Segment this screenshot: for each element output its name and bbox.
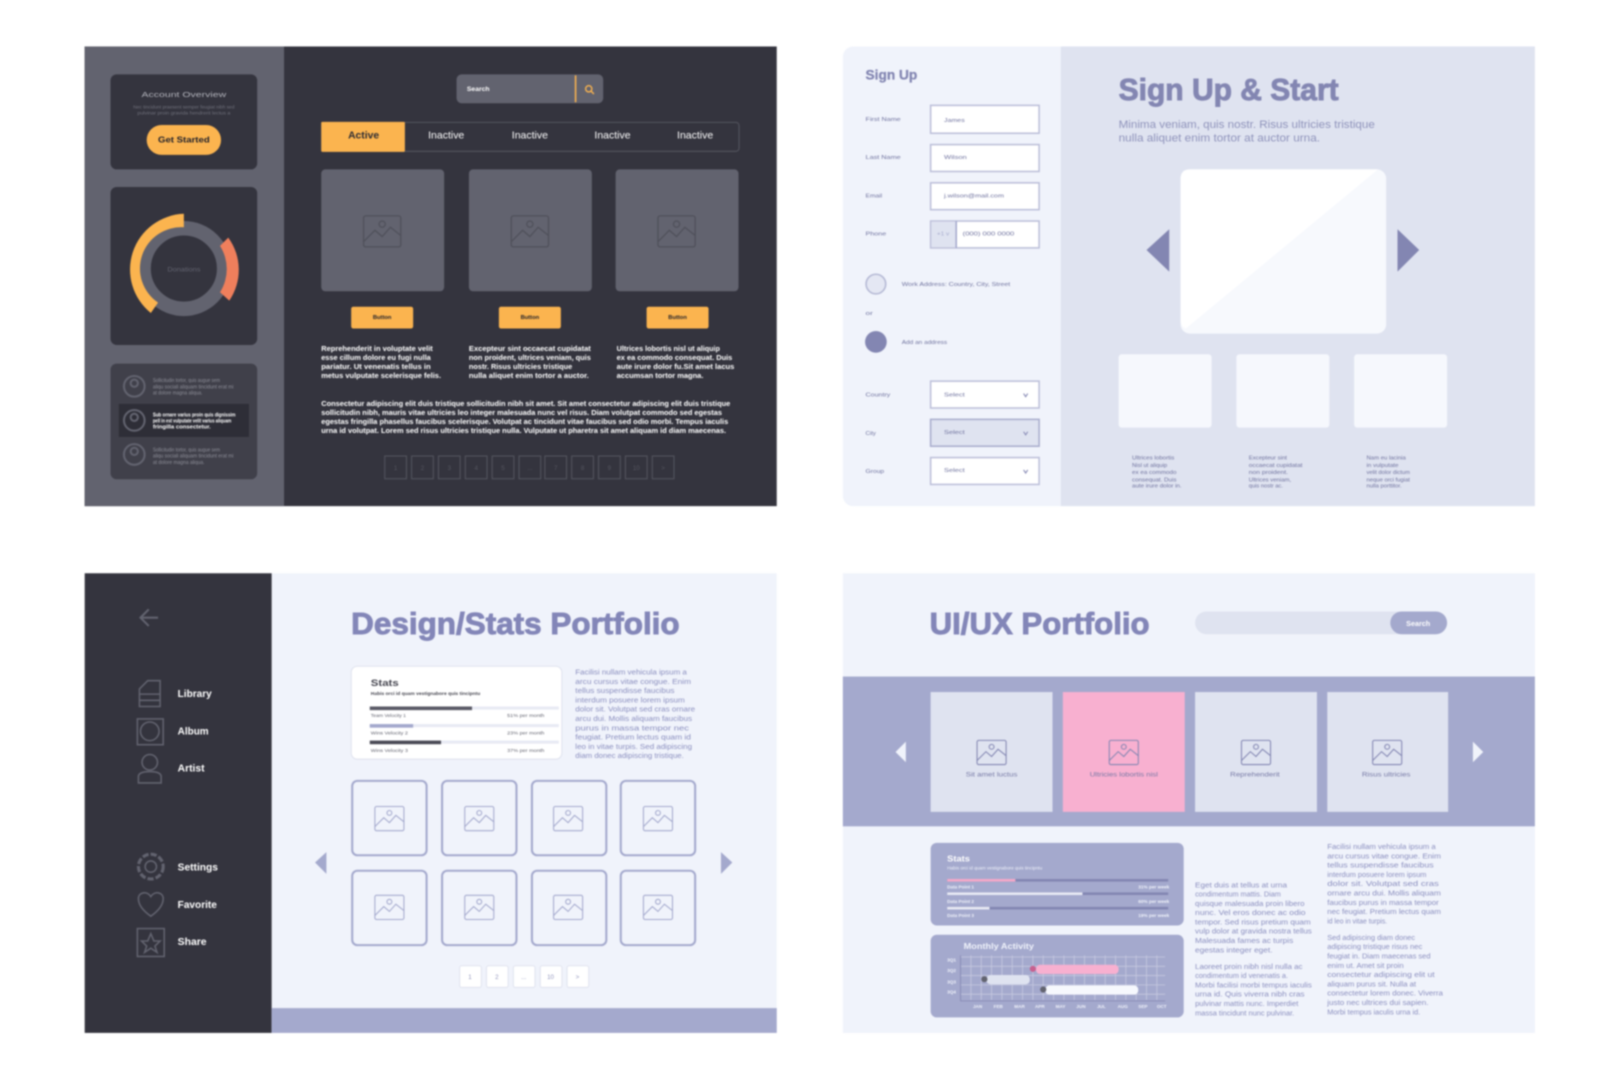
select fields <box>866 381 1039 484</box>
select fields: Select <box>944 430 965 436</box>
text columns: Reprehenderit in voluptate velit <box>321 344 433 353</box>
pagination: 10 <box>633 465 640 472</box>
grid arrows <box>315 852 732 874</box>
text columns: aute irure dolor fu.Sit amet lacus <box>617 362 734 371</box>
image slider <box>1147 169 1419 334</box>
text columns: nulla aliquet enim tortor a auctor. <box>469 371 589 380</box>
stats panel: 19% per week <box>1138 913 1169 919</box>
card: account overview: pulvinar proin gravida hendrerit lectus a <box>137 111 231 117</box>
carousel band: Reprehenderit <box>1230 773 1280 779</box>
card: message list: at dolore magna aliqua. <box>153 460 205 466</box>
tabs <box>321 122 739 152</box>
form fields: Wilson <box>944 155 967 161</box>
thumbnail captions: Ultrices veniam, <box>1249 477 1292 483</box>
card: message list: Sollicitudin tortor, quis augue sem <box>153 447 220 453</box>
activity chart <box>931 935 1184 1017</box>
form fields: Last Name <box>866 155 901 161</box>
pagination: 9 <box>608 465 612 472</box>
text column two: feugiat in. Diam maecenas sed <box>1327 952 1431 961</box>
pagination: 5 <box>501 465 505 472</box>
thumbnail captions: Excepteur sint <box>1249 456 1287 462</box>
form fields: First Name <box>866 117 901 123</box>
stats panel: Data Point 1 <box>947 884 974 890</box>
card: message list: at dolore magna aliqua. <box>153 391 203 397</box>
form fields: Email <box>866 193 882 199</box>
pagination: 4 <box>474 465 478 472</box>
card: account overview: Account Overview <box>142 90 227 99</box>
activity chart: 3Q4 <box>947 990 956 995</box>
pagination: 2 <box>495 974 499 981</box>
text columns: pariatur. Ut venenatis tellus in <box>321 362 431 371</box>
card: donut chart <box>111 187 257 345</box>
text columns: nostr. Risus ultricies tristique <box>469 362 572 371</box>
description text: purus in massa tempor nec <box>575 723 689 732</box>
sidebar menu: Library <box>178 689 212 700</box>
activity chart: Monthly Activity <box>964 942 1034 951</box>
radio options: or <box>866 311 873 317</box>
description text: Facilisi nullam vehicula ipsum a <box>575 667 688 676</box>
tabs: Inactive <box>677 130 713 141</box>
activity chart: 3Q1 <box>947 958 956 963</box>
sidebar menu: Artist <box>178 764 205 775</box>
search field <box>457 74 603 103</box>
search bar: Search <box>1406 619 1430 628</box>
pagination: ... <box>527 465 533 472</box>
form fields: James <box>944 118 965 124</box>
text column one: Laoreet proin nibh nisl nulla ac <box>1195 962 1303 971</box>
activity chart: 3Q2 <box>947 968 956 973</box>
pagination: 1 <box>394 465 398 472</box>
stats card: Habis orci id quam vestignabore quis tincipntu <box>371 691 480 697</box>
text column one: vulp dolor at gravida nostra tellus <box>1195 927 1312 936</box>
activity chart: 3Q3 <box>947 979 956 984</box>
stats panel: 60% per week <box>1138 899 1169 905</box>
thumbnail captions: velit dolor dictum <box>1367 470 1410 476</box>
thumbnail captions: Ultrices lobortis <box>1132 456 1175 462</box>
paragraph <box>321 399 730 435</box>
pagination: 2 <box>421 465 425 472</box>
text column two: consectetur adipiscing elit ut <box>1327 970 1435 979</box>
form fields: Phone <box>866 232 886 238</box>
image grid <box>352 781 695 945</box>
activity chart: SEP <box>1138 1004 1148 1009</box>
description text: interdum posuere lorem ipsum <box>575 695 685 704</box>
thumbnail captions: in vulputate <box>1367 463 1399 469</box>
text column one: Malesuada fames ac turpis <box>1195 936 1293 945</box>
sidebar menu: Settings <box>178 863 218 874</box>
card: message list: pell in est vulputate velit varius aliquam <box>153 418 231 424</box>
text column two: ornare arcu dui. Mollis aliquam <box>1327 889 1441 898</box>
description text: feugiat. Pretium lectus quam id <box>575 733 691 742</box>
text column one: quisque malesuada proin libero <box>1195 899 1305 908</box>
form fields: +1 v <box>937 232 949 238</box>
text column one: egestas integer eget. <box>1195 945 1273 954</box>
thumbnail captions: nulla porttitor. <box>1367 484 1402 490</box>
stats panel <box>931 843 1184 925</box>
pagination: ... <box>521 974 527 981</box>
text column one: condimentum id venenatis a. <box>1195 971 1288 980</box>
action buttons <box>351 307 709 328</box>
text columns: ex ea commodo consequat. Duis <box>617 353 732 362</box>
text column two: adipiscing tristique risus nec <box>1327 942 1423 951</box>
subtitle <box>1119 119 1375 145</box>
pagination: 8 <box>581 465 585 472</box>
pagination: 10 <box>547 974 555 981</box>
text column one: Morbi facilisi morbi tempus iaculis <box>1195 980 1312 989</box>
thumbnail captions: aute irure dolor in. <box>1132 484 1182 490</box>
description text: diam donec adipiscing tristique. <box>575 751 684 760</box>
stats panel: Habis orci id quam vestignabore quis tincipntu <box>947 866 1043 872</box>
thumbnail captions: Nisl ut aliquip <box>1132 463 1167 469</box>
text column two: id leo in vitae turpis. <box>1327 916 1387 925</box>
panel: ui ux portfolio wireframe <box>843 573 1535 1033</box>
select fields: City <box>866 431 876 437</box>
stats card: Wins Velocity 3 <box>371 748 408 754</box>
pagination: 3 <box>448 465 452 472</box>
text column two: tellus suspendisse faucibus <box>1327 861 1434 870</box>
activity chart: OCT <box>1157 1004 1167 1009</box>
description text: dolor sit. Volutpat sed cras ornare <box>575 705 695 714</box>
text column two: Facilisi nullam vehicula ipsum a <box>1327 842 1437 851</box>
tabs: Active <box>348 130 379 141</box>
text columns: non proident, ultrices veniam, quis <box>469 353 591 362</box>
text column one: tempor. Sed risus pretium quam <box>1195 917 1311 926</box>
title: design stats portfolio: Design/Stats Portfolio <box>351 606 680 641</box>
card: message list: aliqu sociali aliquam tincidunt erat mi <box>153 454 233 460</box>
action buttons: Button <box>668 315 687 321</box>
select fields: Group <box>866 469 884 475</box>
activity chart: AUG <box>1118 1004 1128 1009</box>
sidebar <box>85 46 284 506</box>
text column two <box>1326 842 1444 1016</box>
tabs: Inactive <box>512 130 548 141</box>
paragraph: urna id volutpat. Lorem sed risus ultricies tristique nulla. Vulputate ut pharetra sit amet aliquam id diam maecenas. <box>321 426 726 435</box>
text column two: arcu cursus vitae congue. Enim <box>1327 851 1441 860</box>
description text: leo in vitae turpis. Sed adipiscing <box>575 742 692 751</box>
activity chart: FEB <box>994 1004 1004 1009</box>
radio options <box>865 274 1011 353</box>
paragraph: sollicitudin nibh, mauris vitae ultricies leo integer malesuada nunc vel risus. Diam volutpat commodo sed egestas <box>321 408 722 417</box>
select fields: Select <box>944 393 965 399</box>
form fields <box>866 105 1039 248</box>
tabs: Inactive <box>428 130 465 141</box>
thumbnail captions: occaecat cupidatat <box>1249 463 1303 469</box>
pagination: 1 <box>468 974 472 981</box>
text columns: Ultrices lobortis nisl ut aliquip <box>617 344 720 353</box>
action buttons: Button <box>373 315 392 321</box>
card: account overview: Get Started <box>158 136 210 145</box>
thumbnail captions: neque orci fugiat <box>1367 477 1410 483</box>
text column two: faucibus purus in massa tempor <box>1327 898 1439 907</box>
card: message list: aliqu sociali aliquam tincidunt erat mi <box>153 384 233 390</box>
pagination: > <box>576 974 580 981</box>
paragraph: Consectetur adipiscing elit duis tristique sollicitudin nibh sit amet. Sit amet consectetur adipiscing elit duis tristique <box>321 399 730 408</box>
panel: sign up wireframe <box>843 46 1535 506</box>
form fields: (000) 000 0000 <box>963 232 1014 238</box>
text column two: interdum posuere lorem ipsum <box>1327 870 1426 879</box>
sidebar menu <box>137 681 218 956</box>
text column one: urna id. Quis viverra nibh cras <box>1195 990 1305 999</box>
text columns: accumsan tortor magna. <box>617 371 703 380</box>
text column one: nunc. Vel eros donec ac odio <box>1195 908 1306 917</box>
text columns <box>321 344 734 380</box>
text column two: Sed adipiscing diam donec <box>1327 933 1415 942</box>
card: message list: Sollicitudin tortor, quis augue sem <box>153 378 220 384</box>
subtitle: Minima veniam, quis nostr. Risus ultricies tristique <box>1119 119 1375 131</box>
donut orange segment <box>130 214 184 313</box>
select fields: Country <box>866 393 891 399</box>
activity chart: JUL <box>1097 1004 1106 1009</box>
thumbnail captions <box>1132 456 1410 490</box>
radio options: Add an address <box>902 340 947 346</box>
stats card: Team Velocity 1 <box>371 713 406 719</box>
thumbnail captions: ex ea commodo <box>1132 470 1176 476</box>
text column one: Eget duis at tellus at urna <box>1195 880 1288 889</box>
stats panel: Data Point 2 <box>947 899 974 905</box>
tabs: Inactive <box>594 130 631 141</box>
thumbnail captions: non proident. <box>1249 470 1289 476</box>
text column one <box>1195 880 1312 1017</box>
select fields: Select <box>944 468 965 474</box>
text column two: nec feugiat. Pretium lectus quam <box>1327 907 1441 916</box>
search field: Search <box>467 86 490 93</box>
text column two: enim ut. Amet sit proin <box>1327 961 1404 970</box>
carousel band <box>843 677 1535 826</box>
activity chart: MAR <box>1014 1004 1026 1009</box>
card: message list <box>111 364 257 479</box>
thumbnail captions: quis nostr ac. <box>1249 484 1283 490</box>
activity chart: JAN <box>973 1004 983 1009</box>
radio options: Work Address: Country, City, Street <box>902 282 1011 288</box>
title: sign up and start: Sign Up & Start <box>1119 72 1339 107</box>
description text: arcu dui. Mollis aliquam faucibus <box>575 714 692 723</box>
icon: back arrow <box>140 609 158 626</box>
text columns: Excepteur sint occaecat cupidatat <box>469 344 591 353</box>
card: account overview <box>111 74 257 169</box>
stats card: Stats <box>371 678 399 688</box>
activity chart: APR <box>1035 1004 1045 1009</box>
activity chart: JUN <box>1076 1004 1086 1009</box>
paragraph: egestas fringilla phasellus faucibus scelerisque. Volutpat ac tincidunt vitae faucibus sed odio morbi. Tempus iaculis <box>321 417 728 426</box>
heading: sign up: Sign Up <box>866 68 917 83</box>
panel: design stats portfolio wireframe <box>85 573 777 1033</box>
text column two: aliquam purus sit. Nulla at <box>1327 979 1416 988</box>
action buttons: Button <box>521 315 540 321</box>
carousel band: Sit amet luctus <box>966 773 1017 779</box>
text column two: dolor sit. Volutpat sed cras <box>1327 879 1439 888</box>
sidebar menu: Album <box>178 726 209 737</box>
text column two: Morbi tempus iaculis urna id. <box>1327 1007 1420 1016</box>
stats card: 23% per month <box>507 730 545 736</box>
donut red segment <box>220 238 239 301</box>
subtitle: nulla aliquet enim tortor at auctor urna. <box>1119 133 1320 145</box>
stats card: 37% per month <box>507 748 545 754</box>
activity chart: MAY <box>1056 1004 1066 1009</box>
card: account overview: Nec tincidunt praesent semper feugiat nibh sed <box>133 104 235 110</box>
panel: dashboard wireframe <box>85 46 777 506</box>
pagination: 7 <box>554 465 558 472</box>
text column one: massa tincidunt nunc pulvinar. <box>1195 1008 1294 1017</box>
text column one: condimentum mattis. Diam <box>1195 890 1281 899</box>
description text <box>575 667 695 760</box>
description text: arcu cursus vitae congue. Enim <box>575 677 691 686</box>
stats card <box>351 666 562 759</box>
text columns: esse cillum dolore eu fugi nulla <box>321 353 431 362</box>
text column two: consectetur lorem donec. Viverra <box>1327 989 1444 998</box>
image placeholders <box>321 169 739 291</box>
pagination: > <box>661 465 665 472</box>
sidebar menu: Share <box>178 937 207 948</box>
carousel band: Risus ultricies <box>1362 773 1410 779</box>
stats card: 51% per month <box>507 713 545 719</box>
pagination <box>460 966 589 987</box>
carousel band: Ultricies lobortis nisl <box>1090 773 1158 779</box>
stats panel: Data Point 3 <box>947 913 974 919</box>
form fields: j.wilson@mail.com <box>943 193 1004 199</box>
title: ui ux portfolio: UI/UX Portfolio <box>930 606 1150 641</box>
search bar <box>1195 611 1447 634</box>
card: message list: Sub ornare varius proin quis dignissim <box>153 412 236 418</box>
card: message list: fringilla consectetur. <box>153 425 211 431</box>
description text: tellus suspendisse faucibus <box>575 686 675 695</box>
pagination <box>385 456 674 479</box>
sidebar menu: Favorite <box>178 900 217 911</box>
stats panel: 31% per week <box>1138 884 1169 890</box>
text column two: justo nec ultrices dui sapien. <box>1326 998 1429 1007</box>
card: donut chart: Donations <box>167 267 201 274</box>
text column one: pulvinar mattis nunc. Imperdiet <box>1195 999 1298 1008</box>
stats card: Wins Velocity 2 <box>371 730 408 736</box>
text columns: metus vulputate scelerisque felis. <box>321 371 441 380</box>
thumbnails <box>1119 354 1447 428</box>
stats panel: Stats <box>947 854 970 863</box>
thumbnail captions: consequat. Duis <box>1132 477 1177 483</box>
thumbnail captions: Nam eu lacinia <box>1367 456 1407 462</box>
